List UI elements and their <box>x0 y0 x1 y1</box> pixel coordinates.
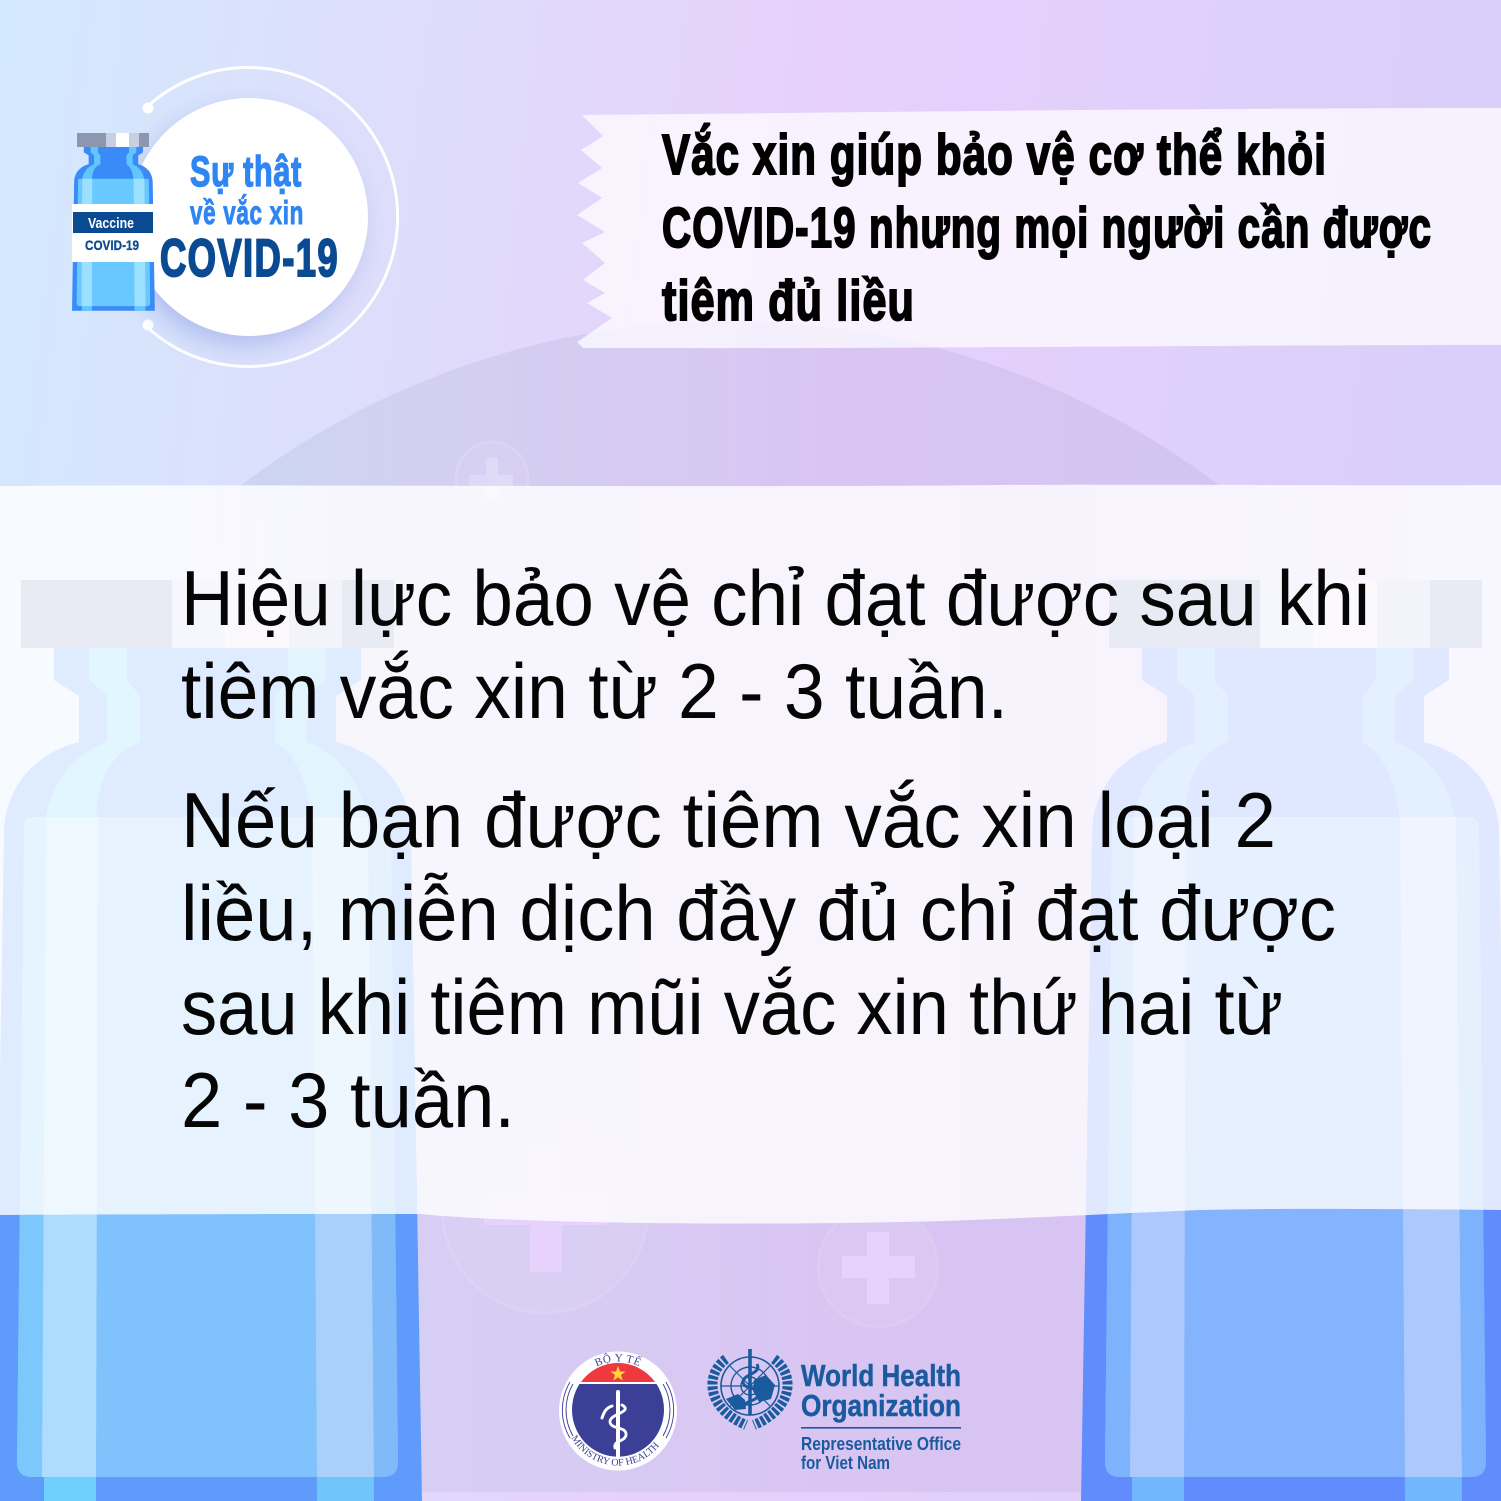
background bubble: cross bottom left <box>442 1107 648 1313</box>
logo text: World Health Organization: for Viet Nam <box>801 1453 890 1473</box>
badge ring <box>148 68 398 367</box>
body text paragraph 2: Nếu bạn được tiêm vắc xin loại 2 <box>181 776 1276 864</box>
large vial left <box>0 580 422 1501</box>
badge text: về vắc xin <box>190 194 304 231</box>
body text paragraph 2: sau khi tiêm mũi vắc xin thứ hai từ <box>181 963 1283 1051</box>
large vial right <box>1081 580 1501 1501</box>
white content panel <box>0 485 1501 1224</box>
badge vial icon <box>72 133 156 311</box>
logo text: World Health Organization: Representative Office <box>801 1434 961 1454</box>
badge text <box>160 148 339 288</box>
logo text: Ministry of Health: MINISTRY OF HEALTH <box>571 1434 660 1466</box>
logo: WHO emblem <box>712 1349 788 1425</box>
badge vial icon: COVID-19 <box>85 238 139 253</box>
badge text: Sự thật <box>190 148 302 196</box>
badge vial icon: Vaccine <box>88 215 134 232</box>
header ribbon <box>577 108 1501 348</box>
logo text: World Health Organization: Organization <box>801 1388 961 1423</box>
logo: Ministry of Health <box>559 1352 677 1470</box>
logo text: Bộ Y Tế: BỘ Y TẾ <box>594 1353 642 1366</box>
badge: Sự thật về vắc xin COVID-19 <box>72 68 398 367</box>
background bubble: cross bottom right <box>818 1207 938 1327</box>
body text paragraph 2: liều, miễn dịch đầy đủ chỉ đạt được <box>181 869 1336 957</box>
logo text: World Health Organization: World Health <box>801 1358 961 1393</box>
header title: tiêm đủ liều <box>662 269 915 333</box>
body text paragraph 1: tiêm vắc xin từ 2 - 3 tuần. <box>181 647 1008 735</box>
header title <box>662 122 1432 333</box>
body text paragraph 1: Hiệu lực bảo vệ chỉ đạt được sau khi <box>181 554 1370 642</box>
logo text: World Health Organization <box>801 1358 961 1473</box>
background bubble: cross top <box>456 442 528 514</box>
body text paragraph 1 <box>181 554 1370 735</box>
logo: staff and serpent <box>602 1392 626 1456</box>
body text paragraph 2 <box>181 776 1336 1144</box>
background dome <box>0 321 1501 1492</box>
badge text: COVID-19 <box>160 229 339 288</box>
body text paragraph 2: 2 - 3 tuần. <box>181 1056 515 1144</box>
